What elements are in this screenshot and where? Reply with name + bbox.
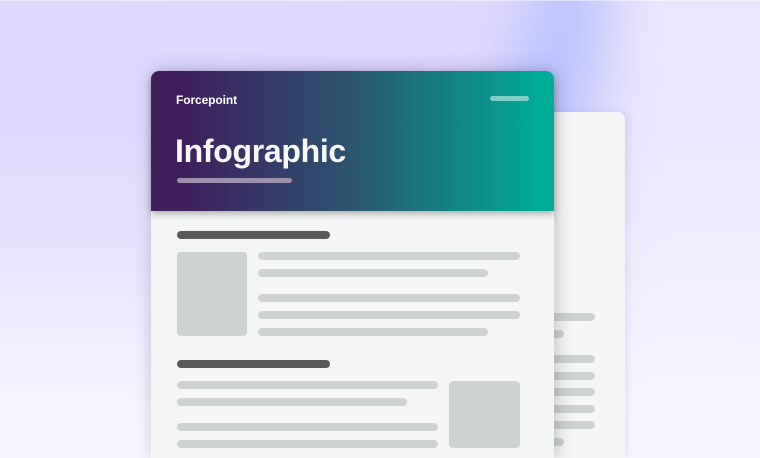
section 1 image: [177, 252, 247, 336]
section 1 text lines: [258, 252, 520, 336]
panel: back document: [500, 112, 625, 458]
section 2 text lines: [177, 381, 438, 448]
section 1 heading: [177, 231, 330, 239]
header banner: [151, 71, 554, 211]
back document text lines: [554, 313, 595, 446]
logo: Forcepoint: [176, 93, 237, 107]
header pill: [490, 96, 529, 101]
top highlight edge: [0, 0, 760, 1]
blue glow streak: [473, 0, 629, 246]
section 2 image: [449, 381, 520, 448]
title: Infographic: [175, 133, 346, 169]
section 2 heading: [177, 360, 330, 368]
panel: front document: [151, 71, 554, 458]
subtitle bar: [177, 178, 292, 183]
